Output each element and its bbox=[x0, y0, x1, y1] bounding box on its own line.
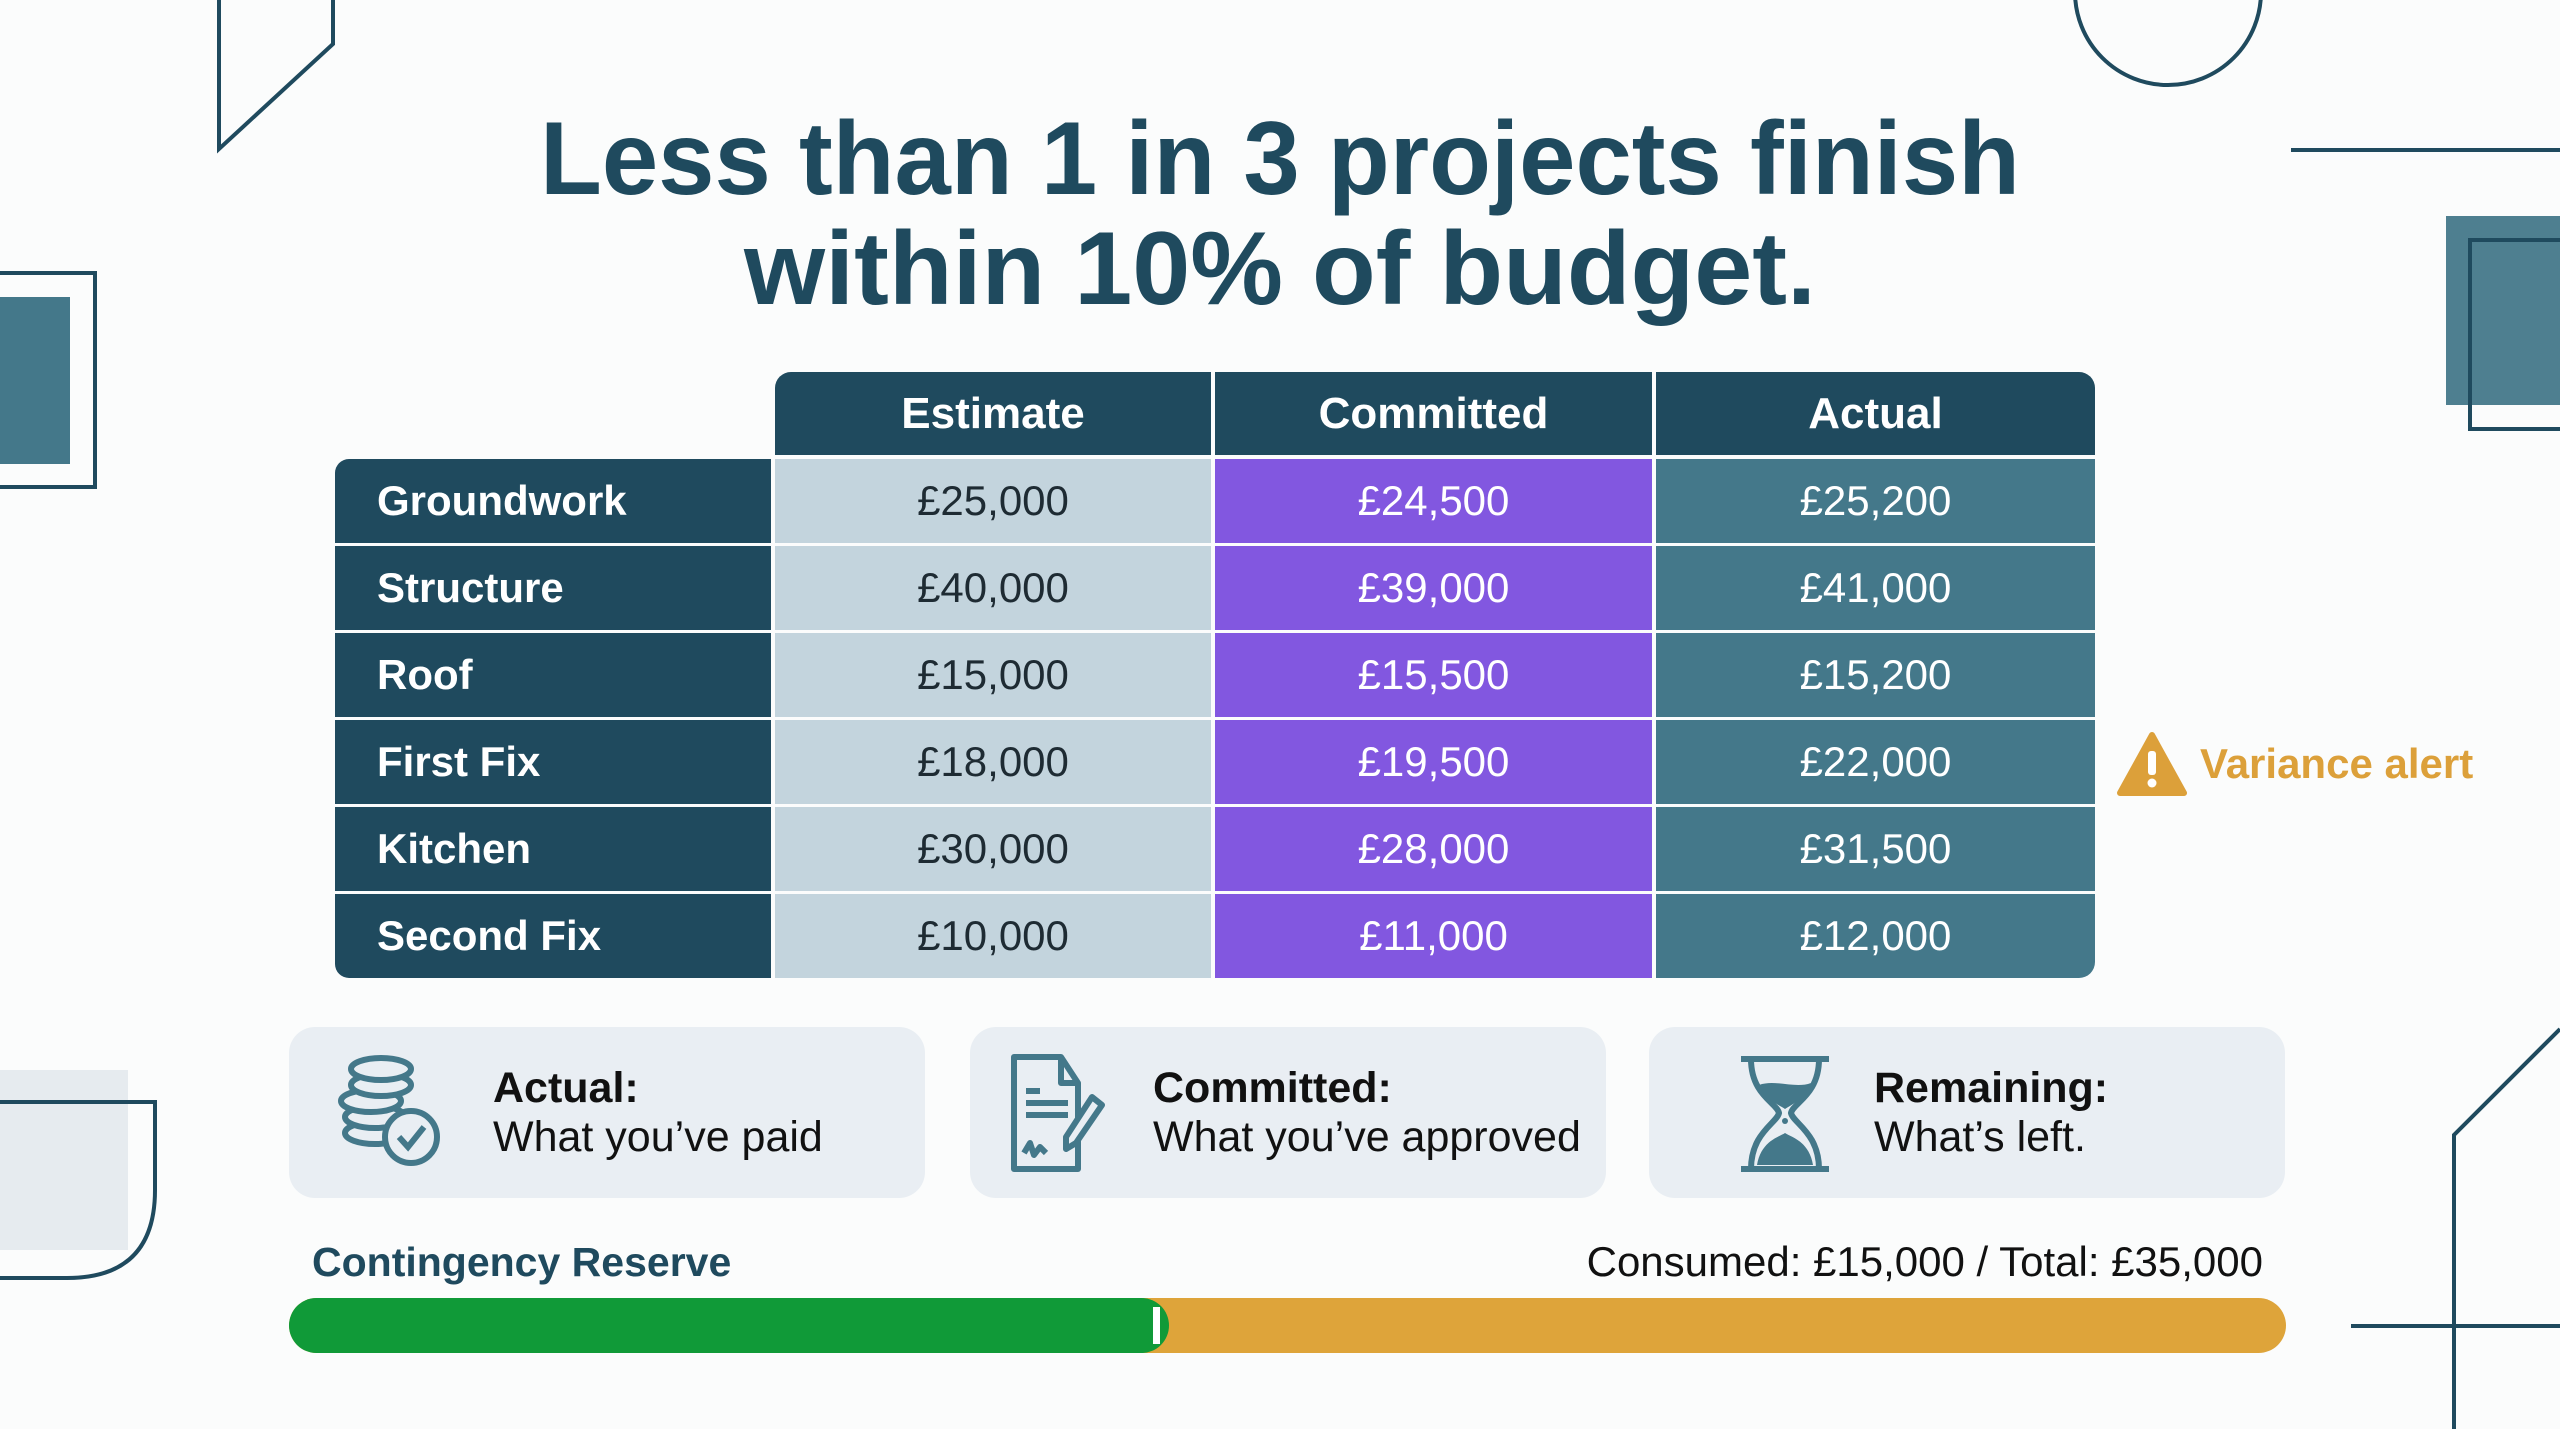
icon: hourglass bbox=[1741, 1056, 1829, 1172]
row: Roof bbox=[335, 633, 771, 717]
variance alert callout: Variance alert bbox=[2200, 740, 2473, 787]
variance alert callout bbox=[2117, 732, 2473, 796]
table: £39,000 bbox=[1358, 564, 1509, 611]
table: £22,000 bbox=[1800, 738, 1951, 785]
table: £15,200 bbox=[1800, 651, 1951, 698]
row: Second Fix: Second Fix bbox=[377, 912, 601, 959]
icon: warning triangle bbox=[2117, 732, 2187, 796]
row: Kitchen: Kitchen bbox=[377, 825, 531, 872]
progress bar bbox=[289, 1298, 2286, 1353]
row: Structure: Structure bbox=[377, 564, 564, 611]
table: £24,500 bbox=[1358, 477, 1509, 524]
card: Remaining: Remaining: bbox=[1874, 1064, 2108, 1112]
table: £41,000 bbox=[1800, 564, 1951, 611]
contingency label: Contingency Reserve bbox=[312, 1239, 731, 1285]
table: £10,000 bbox=[917, 912, 1069, 959]
row: Groundwork bbox=[335, 459, 771, 543]
table: £19,500 bbox=[1358, 738, 1509, 785]
row: Second Fix bbox=[335, 894, 771, 978]
card: Remaining bbox=[1649, 1027, 2285, 1198]
table: £15,000 bbox=[917, 651, 1069, 698]
card: Committed: What you’ve approved bbox=[1153, 1113, 1581, 1161]
table: £31,500 bbox=[1800, 825, 1951, 872]
table: £12,000 bbox=[1800, 912, 1951, 959]
row: First Fix bbox=[335, 720, 771, 804]
title: within 10% of budget. bbox=[743, 211, 1816, 327]
row: Groundwork: Groundwork bbox=[377, 477, 627, 524]
table: £30,000 bbox=[917, 825, 1069, 872]
card: Remaining: What’s left. bbox=[1874, 1113, 2086, 1161]
table: £40,000 bbox=[917, 564, 1069, 611]
table: Actual bbox=[1808, 388, 1943, 438]
table: £15,500 bbox=[1358, 651, 1509, 698]
table header: Estimate bbox=[901, 388, 1085, 438]
table: £28,000 bbox=[1358, 825, 1509, 872]
table: £11,000 bbox=[1359, 912, 1508, 959]
consumed total text: Consumed: £15,000 / Total: £35,000 bbox=[1587, 1238, 2263, 1285]
table: £25,200 bbox=[1800, 477, 1951, 524]
row: First Fix: First Fix bbox=[377, 738, 540, 785]
row: Roof: Roof bbox=[377, 651, 473, 698]
table: £25,000 bbox=[917, 477, 1069, 524]
card: Committed: Committed: bbox=[1153, 1064, 1392, 1112]
title bbox=[540, 101, 2020, 327]
icon: coins with check bbox=[338, 1055, 440, 1166]
title: Less than 1 in 3 projects finish bbox=[540, 101, 2020, 217]
card: Actual: What you’ve paid bbox=[493, 1113, 823, 1161]
icon: signed document bbox=[1011, 1054, 1105, 1172]
card: Committed bbox=[970, 1027, 1606, 1198]
table bbox=[335, 372, 2095, 978]
table: £18,000 bbox=[917, 738, 1069, 785]
row: Kitchen bbox=[335, 807, 771, 891]
row: Structure bbox=[335, 546, 771, 630]
card: Actual bbox=[289, 1027, 925, 1198]
table: Committed bbox=[1319, 388, 1548, 438]
table header bbox=[775, 372, 1211, 455]
card: Actual: Actual: bbox=[493, 1064, 639, 1112]
